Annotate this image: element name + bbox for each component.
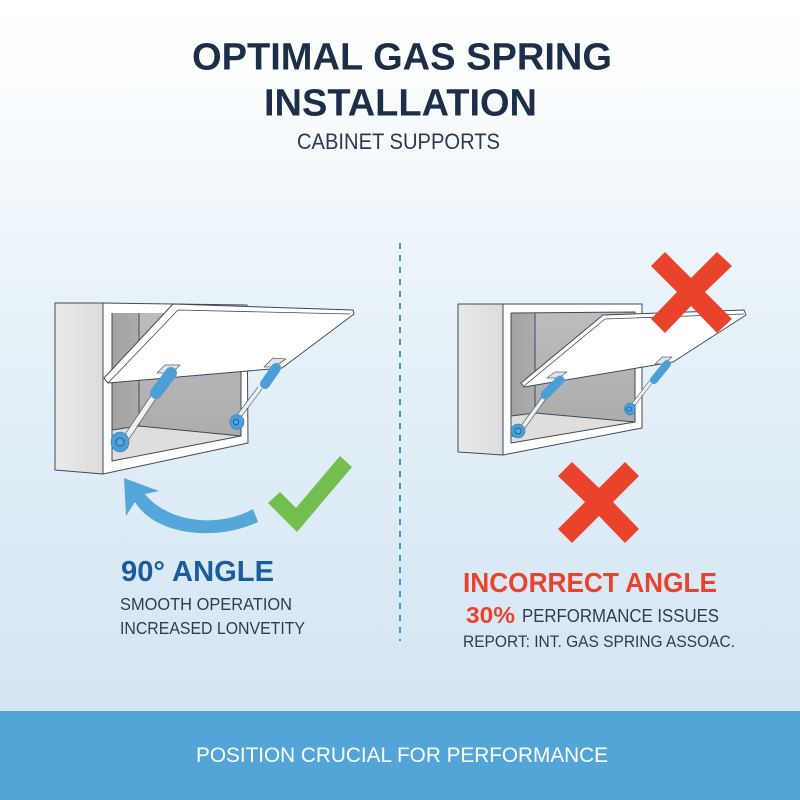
- text: correct angle benefits: SMOOTH OPERATION: [120, 594, 292, 614]
- cabinet front frame: [503, 304, 642, 455]
- right gas spring: [624, 357, 672, 415]
- illustration: incorrect cabinet: [458, 304, 746, 455]
- text: correct angle benefits: INCREASED LONVETITY: [120, 618, 305, 638]
- cabinet interior: [511, 312, 635, 443]
- left gas spring: [111, 365, 180, 452]
- cabinet side panel: [55, 303, 103, 474]
- text: performance statistic: [466, 602, 719, 628]
- text: correct angle benefits: [120, 594, 305, 638]
- cabinet interior: [112, 313, 241, 461]
- open door: [104, 304, 354, 383]
- title: INSTALLATION: [264, 82, 537, 124]
- illustration: correct cabinet: [55, 303, 354, 474]
- title: OPTIMAL GAS SPRING: [192, 36, 612, 78]
- icon: red cross on door: [651, 252, 732, 333]
- left gas spring: [511, 372, 567, 438]
- center divider: [399, 243, 401, 641]
- text: correct angle heading: 90° ANGLE: [121, 556, 274, 588]
- cabinet front frame: [103, 303, 248, 474]
- subtitle: CABINET SUPPORTS: [297, 129, 500, 154]
- text: incorrect angle heading: INCORRECT ANGLE: [463, 567, 717, 598]
- footer text: POSITION CRUCIAL FOR PERFORMANCE: [196, 744, 608, 767]
- text: performance statistic: PERFORMANCE ISSUES: [522, 606, 719, 626]
- text: report source: REPORT: INT. GAS SPRING ASSOAC.: [463, 633, 735, 651]
- curved arrow: [124, 478, 258, 533]
- footer band: [0, 711, 800, 800]
- icon: red cross below cabinet: [558, 462, 639, 543]
- icon: green check: [268, 456, 352, 532]
- title: [192, 36, 612, 124]
- open door: [521, 310, 746, 387]
- cabinet side panel: [458, 304, 503, 455]
- right gas spring: [230, 358, 286, 430]
- text: performance statistic: 30%: [466, 602, 515, 628]
